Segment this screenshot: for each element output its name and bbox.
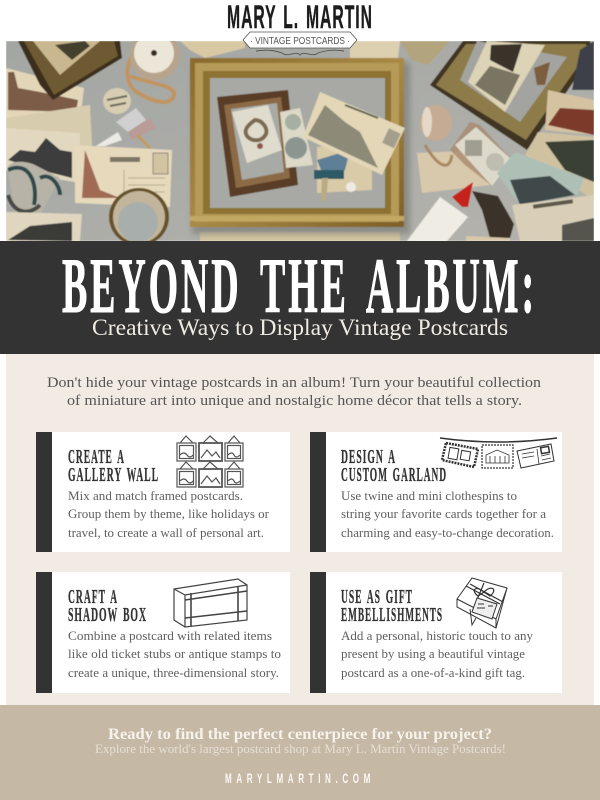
panel: craft a shadow box bbox=[36, 572, 290, 693]
body text: create a unique, three-dimensional story. bbox=[68, 665, 279, 680]
intro text: Don't hide your vintage postcards in an album! Turn your beautiful collection bbox=[47, 375, 542, 391]
body text: Add a personal, historic touch to any bbox=[341, 628, 533, 643]
body text: Combine a postcard with related items bbox=[68, 628, 272, 643]
body text: string your favorite cards together for a bbox=[341, 506, 546, 521]
heading bbox=[68, 586, 147, 626]
intro text bbox=[47, 375, 542, 409]
icon: framed pictures bbox=[177, 436, 243, 487]
panel: use as gift embellishments bbox=[310, 572, 562, 693]
call to action subtext: Explore the world's largest postcard shop at Mary L. Martin Vintage Postcards! bbox=[95, 741, 506, 756]
body text bbox=[341, 628, 533, 680]
heading: CREATE A bbox=[68, 446, 125, 468]
intro text: of miniature art into unique and nostalgic home décor that tells a story. bbox=[67, 393, 522, 409]
icon: gift box with tag bbox=[457, 578, 507, 628]
body text bbox=[341, 488, 554, 540]
body text: Use twine and mini clothespins to bbox=[341, 488, 517, 503]
panel: beige content area bbox=[6, 354, 594, 705]
body text: postcard as a one-of-a-kind gift tag. bbox=[341, 665, 525, 680]
footer band bbox=[0, 705, 600, 800]
body text: Group them by theme, like holidays or bbox=[68, 506, 270, 521]
logo badge bbox=[243, 32, 357, 48]
title band bbox=[0, 241, 600, 354]
body text bbox=[68, 488, 270, 540]
heading bbox=[68, 446, 159, 486]
heading: USE AS GIFT bbox=[341, 586, 413, 608]
hero photo: vintage postcards and frames bbox=[6, 30, 594, 246]
heading bbox=[341, 446, 447, 486]
panel: use as gift embellishments: EMBELLISHMENTS bbox=[341, 604, 443, 626]
body text: Mix and match framed postcards. bbox=[68, 488, 243, 503]
icon: postcard garland bbox=[440, 438, 557, 468]
panel: craft a shadow box: SHADOW BOX bbox=[68, 604, 147, 626]
heading bbox=[341, 586, 443, 626]
body text bbox=[68, 628, 281, 680]
panel: design a custom garland bbox=[310, 432, 562, 552]
icon: shadow box bbox=[174, 579, 247, 627]
subtitle: Creative Ways to Display Vintage Postcards bbox=[92, 315, 508, 340]
text: MARY L. MARTIN bbox=[227, 0, 373, 35]
call to action heading: Ready to find the perfect centerpiece for your project? bbox=[108, 726, 492, 743]
panel: create a gallery wall: GALLERY WALL bbox=[68, 464, 159, 486]
body text: charming and easy-to-change decoration. bbox=[341, 525, 554, 540]
body text: travel, to create a wall of personal art. bbox=[68, 525, 264, 540]
body text: present by using a beautiful vintage bbox=[341, 646, 525, 661]
panel: design a custom garland: CUSTOM GARLAND bbox=[341, 464, 447, 486]
heading: CRAFT A bbox=[68, 586, 118, 608]
logo flourish bbox=[256, 50, 344, 55]
body text: like old ticket stubs or antique stamps to bbox=[68, 646, 281, 661]
logo badge: · VINTAGE POSTCARDS · bbox=[250, 36, 350, 47]
heading: DESIGN A bbox=[341, 446, 396, 468]
logo bbox=[227, 0, 373, 55]
panel: create a gallery wall bbox=[36, 432, 290, 552]
website: MARYLMARTIN.COM bbox=[225, 770, 375, 786]
